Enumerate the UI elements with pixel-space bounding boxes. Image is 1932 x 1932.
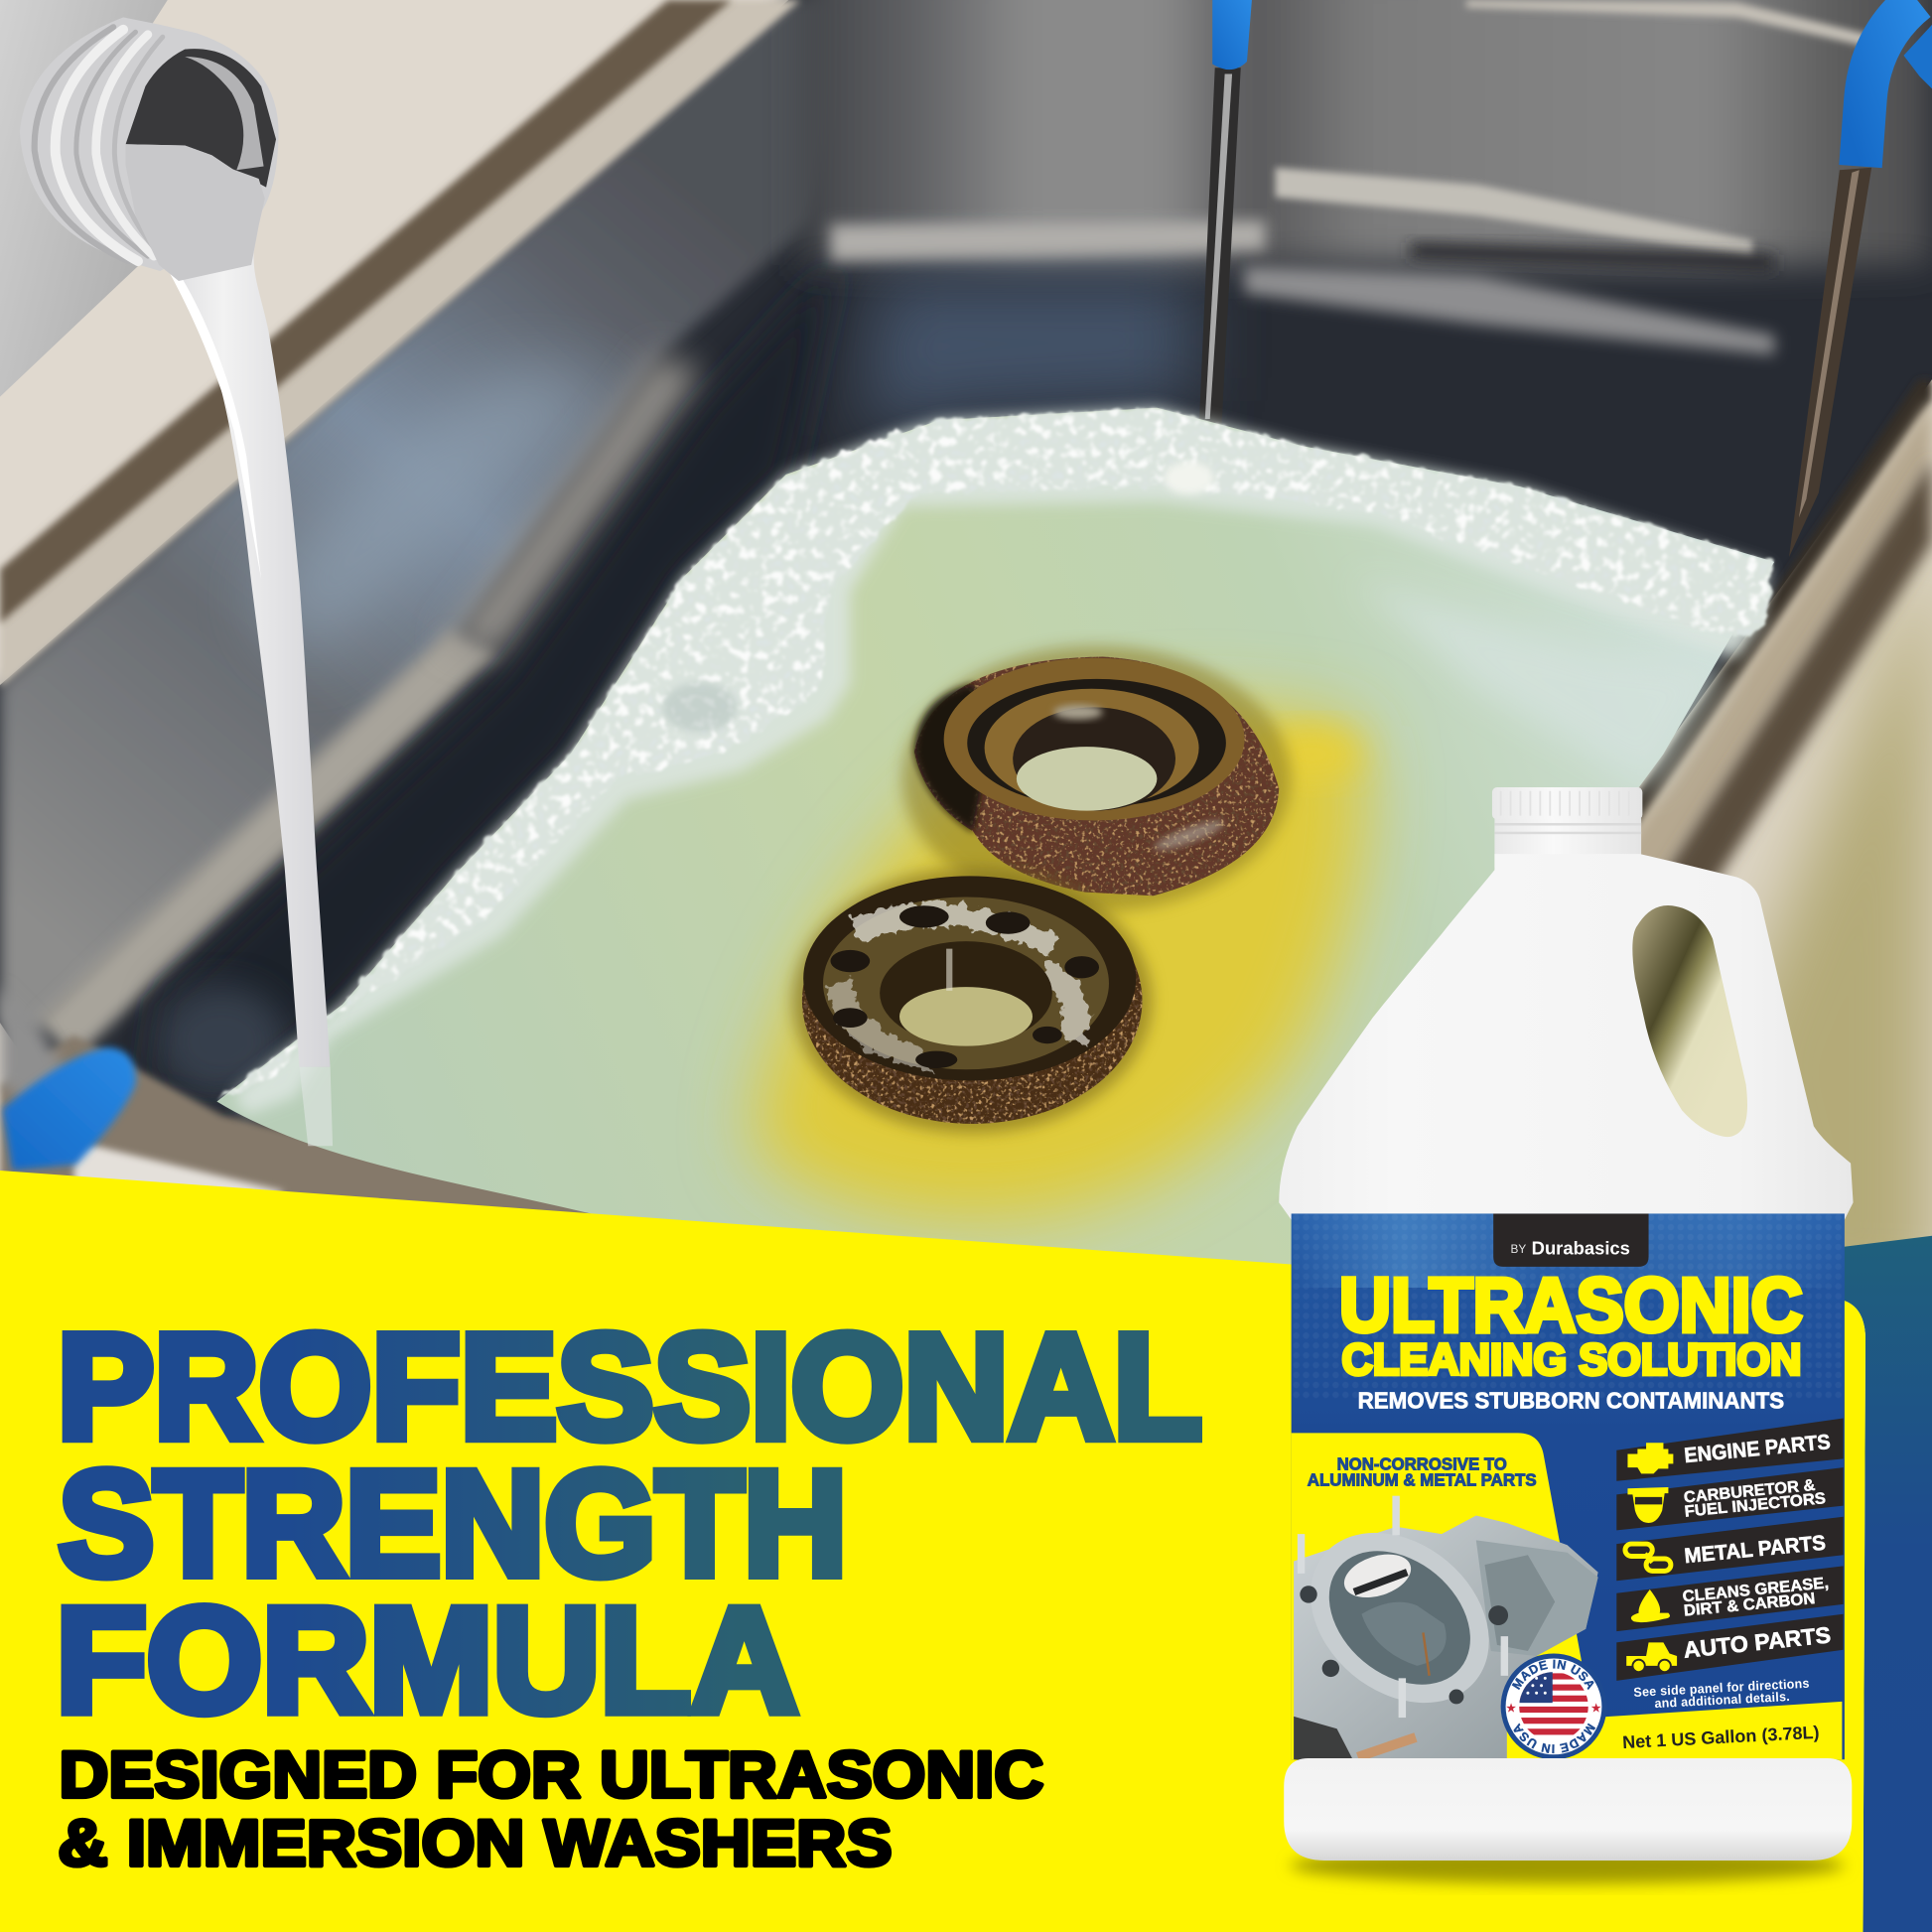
label xyxy=(1291,1213,1845,1760)
product bottle xyxy=(1279,787,1853,1894)
side panel note xyxy=(1633,1676,1810,1711)
bottle body xyxy=(1279,854,1854,1220)
subtitle: & IMMERSION WASHERS xyxy=(58,1806,893,1879)
feature: auto parts xyxy=(1616,1614,1844,1681)
product name: ULTRASONIC xyxy=(1339,1263,1803,1348)
brand tab xyxy=(1493,1213,1649,1267)
feature bands xyxy=(1616,1418,1844,1681)
bottle cap xyxy=(1492,787,1642,868)
feature: carburetor and fuel injectors xyxy=(1616,1467,1844,1530)
rusted ring: lower xyxy=(792,868,1152,1134)
yellow glow xyxy=(752,710,1365,1220)
brand tab: Durabasics xyxy=(1532,1237,1630,1258)
jug and spout xyxy=(0,0,278,397)
title: professional strength formula: FORMULA xyxy=(56,1577,798,1743)
yellow callout panel xyxy=(1292,1433,1842,1759)
title: professional strength formula xyxy=(56,1303,1202,1743)
rim: right xyxy=(1638,379,1932,1307)
feature: cleans grease, dirt and carbon xyxy=(1616,1566,1844,1631)
pouring stream xyxy=(136,173,333,1146)
yellow callout panel: NON-CORROSIVE TO xyxy=(1337,1454,1507,1474)
tank interior xyxy=(0,0,1932,1138)
carburetor image xyxy=(1277,1496,1598,1773)
feature: metal parts xyxy=(1616,1517,1844,1581)
rusted ring: upper xyxy=(901,645,1292,911)
foam soft underlay xyxy=(234,408,1769,1115)
dark wedge xyxy=(140,298,812,1032)
subtitle xyxy=(58,1737,1043,1879)
bottom rim xyxy=(0,986,1307,1307)
back wall xyxy=(801,0,1932,265)
feature: engine parts: ENGINE PARTS xyxy=(1683,1431,1832,1467)
badge: made in USA: MADE IN USA xyxy=(1511,1660,1594,1690)
feature: auto parts: AUTO PARTS xyxy=(1682,1621,1832,1663)
badge: made in USA: MADE IN USA xyxy=(1513,1724,1596,1753)
feature: carburetor and fuel injectors: CARBURETOR & xyxy=(1683,1476,1816,1506)
right blue panel xyxy=(1842,1236,1932,1932)
photo: ultrasonic tank xyxy=(0,0,1932,1307)
tagline: REMOVES STUBBORN CONTAMINANTS xyxy=(1358,1388,1784,1414)
cleaning liquid xyxy=(216,408,1774,1282)
feature: carburetor and fuel injectors: FUEL INJECTORS xyxy=(1684,1489,1827,1521)
title: professional strength formula: STRENGTH xyxy=(59,1440,847,1606)
badge: made in USA xyxy=(1501,1654,1606,1758)
feature: metal parts: METAL PARTS xyxy=(1684,1532,1827,1568)
yellow callout panel: ALUMINUM & METAL PARTS xyxy=(1308,1470,1537,1490)
heater rod: right xyxy=(1789,0,1932,557)
side panel note: See side panel for directions xyxy=(1633,1676,1810,1700)
brand tab: BY xyxy=(1511,1243,1526,1256)
net contents: Net 1 US Gallon (3.78L) xyxy=(1622,1723,1820,1752)
blue fitting lower left xyxy=(2,1047,136,1171)
feature: cleans grease, dirt and carbon: DIRT & CARBON xyxy=(1683,1589,1816,1620)
product name: CLEANING SOLUTION xyxy=(1342,1335,1801,1384)
title: professional strength formula: PROFESSIONAL xyxy=(58,1303,1202,1469)
badge: made in USA: ★ xyxy=(1506,1703,1516,1715)
bottle shadow xyxy=(1290,1847,1845,1884)
heater rod: centre xyxy=(1199,0,1252,419)
badge: made in USA: ★ xyxy=(1591,1703,1601,1715)
side wall xyxy=(0,0,863,1035)
flag xyxy=(1516,1670,1591,1743)
feature: cleans grease, dirt and carbon: CLEANS GREASE, xyxy=(1682,1574,1830,1605)
feature: engine parts xyxy=(1616,1418,1844,1481)
foam band xyxy=(216,408,1774,1102)
rim: left xyxy=(0,0,801,688)
subtitle: DESIGNED FOR ULTRASONIC xyxy=(60,1737,1043,1811)
light edge band xyxy=(37,628,499,1059)
bottle base xyxy=(1284,1758,1852,1861)
handle opening xyxy=(1632,905,1747,1137)
side panel note: and additional details. xyxy=(1654,1689,1790,1711)
ring bolt holes xyxy=(830,905,1099,1068)
yellow panel xyxy=(0,1171,1865,1932)
product name xyxy=(1339,1263,1803,1384)
